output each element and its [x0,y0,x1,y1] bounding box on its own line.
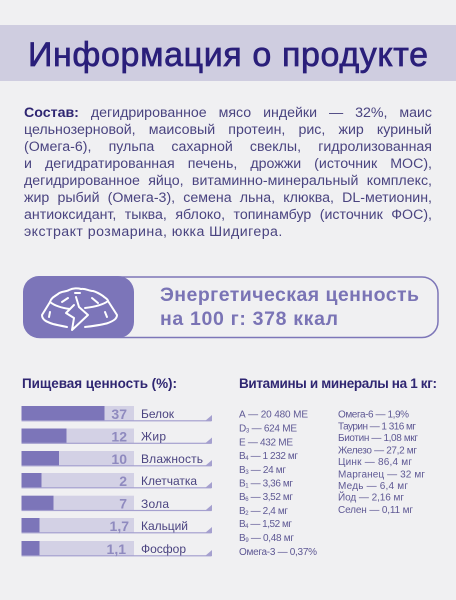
vitamins list: column 2: Селен — 0,11 мг [338,505,413,516]
title band [0,25,456,81]
composition text block: Состав: дегидрированное мясо индейки — 32%, маис [24,104,432,120]
composition text block: цельнозерновой, маисовый протеин, рис, жир куриный [24,122,432,138]
vitamins list: column 1: Омега-3 — 0,37% [239,547,317,558]
bar: moisture: Влажность [141,452,203,466]
icon: bowl with lightning bolt [42,288,117,330]
bar: calcium: 1,7 [110,518,129,534]
vitamins list: column 1: 4 [245,456,249,462]
vitamins list: column 1: В [239,478,246,490]
vitamins list: column 2: Йод — 2,16 мг [338,490,404,504]
vitamins list: column 2: Биотин — 1,08 мкг [338,433,418,444]
vitamins list: column 1: — 0,48 мг [248,533,294,544]
vitamins list: column 1: В [239,492,246,503]
vitamins list: column 1: — 1 232 мг [248,451,298,462]
bar: moisture: 10 [111,451,127,467]
vitamins list: column 2 [338,410,425,516]
vitamins list: column 2: Таурин — 1 316 мг [338,422,416,432]
bar: protein [22,406,212,422]
vitamins list: column 2: Цинк — 86,4 мг [338,457,412,468]
bar: fat [22,428,212,444]
composition text block: дегидрированное яйцо, витаминно-минеральный комплекс, [24,172,432,188]
heading: nutrition: Пищевая ценность (%): [22,376,177,391]
bar: fiber [22,473,212,489]
vitamins list: column 1: — 3,36 мг [248,478,293,490]
vitamins list: column 1: 9 [245,538,249,544]
bar chart: nutrition [22,406,212,557]
bar: fiber: 2 [119,473,127,489]
vitamins list: column 1: D [239,424,246,434]
vitamins list: column 2: Омега-6 — 1,9% [338,410,409,420]
vitamins list: column 1: В [239,519,246,530]
panel: energy value [23,276,438,338]
bar: fiber: Клетчатка [141,474,197,488]
vitamins list: column 1: В [239,465,246,476]
vitamins list: column 1: А — 20 480 МЕ [239,410,308,420]
bar: phosphorus: Фосфор [141,542,186,556]
vitamins list: column 2: Железо — 27,2 мг [338,446,417,456]
vitamins list: column 1: Е — 432 МЕ [239,438,293,448]
bar: phosphorus [22,541,212,557]
vitamins list: column 1: 2 [245,511,249,517]
bar: moisture [22,451,212,467]
composition text block: и дегидратированная печень, дрожжи (источник МОС), [24,156,432,172]
composition text block: (Омега-6), пульпа сахарной свеклы, гидролизованная [24,138,432,154]
bar: fat: Жир [141,430,166,444]
vitamins list: column 1: В [239,451,246,462]
bar: protein: 37 [111,406,127,422]
vitamins list: column 1: 4 [245,524,249,530]
title: Информация о продукте [28,36,428,74]
bar: ash: 7 [119,496,127,512]
bar: calcium [22,518,212,534]
vitamins list: column 2: Марганец — 32 мг [338,470,425,480]
composition text block: экстракт розмарина, юкка Шидигера. [24,224,283,240]
vitamins list: column 1: 3 [246,428,250,434]
vitamins list: column 1: — 624 МЕ [249,424,297,434]
composition text block: антиоксидант, тыква, яблоко, топинамбур (источник ФОС), [24,206,432,222]
heading: vitamins and minerals: Витамины и минералы на 1 кг: [239,376,437,391]
bar: ash: Зола [141,497,169,511]
vitamins list: column 1: В [239,506,246,517]
vitamins list: column 1: — 1,52 мг [248,519,292,530]
composition text block: жир рыбий (Омега-3), семена льна, клюква, DL-метионин, [24,190,432,206]
vitamins list: column 2: Медь — 6,4 мг [338,481,408,492]
energy text: Энергетическая ценность [160,284,419,306]
vitamins list: column 1: 1 [245,484,249,490]
bar: fat: 12 [111,428,127,444]
bar: phosphorus: 1,1 [107,541,126,557]
vitamins list: column 1: 6 [245,497,249,503]
vitamins list: column 1: В [239,533,246,544]
bar: ash [22,496,212,512]
bar: protein: Белок [141,407,175,421]
vitamins list: column 1 [239,410,317,558]
vitamins list: column 1: — 3,52 мг [248,492,293,503]
vitamins list: column 1: — 24 мг [248,465,286,476]
vitamins list: column 1: 3 [245,470,249,476]
energy value text: на 100 г: 378 ккал [160,308,338,330]
bar: calcium: Кальций [141,519,188,533]
composition text block [24,104,432,240]
vitamins list: column 1: — 2,4 мг [248,506,288,517]
